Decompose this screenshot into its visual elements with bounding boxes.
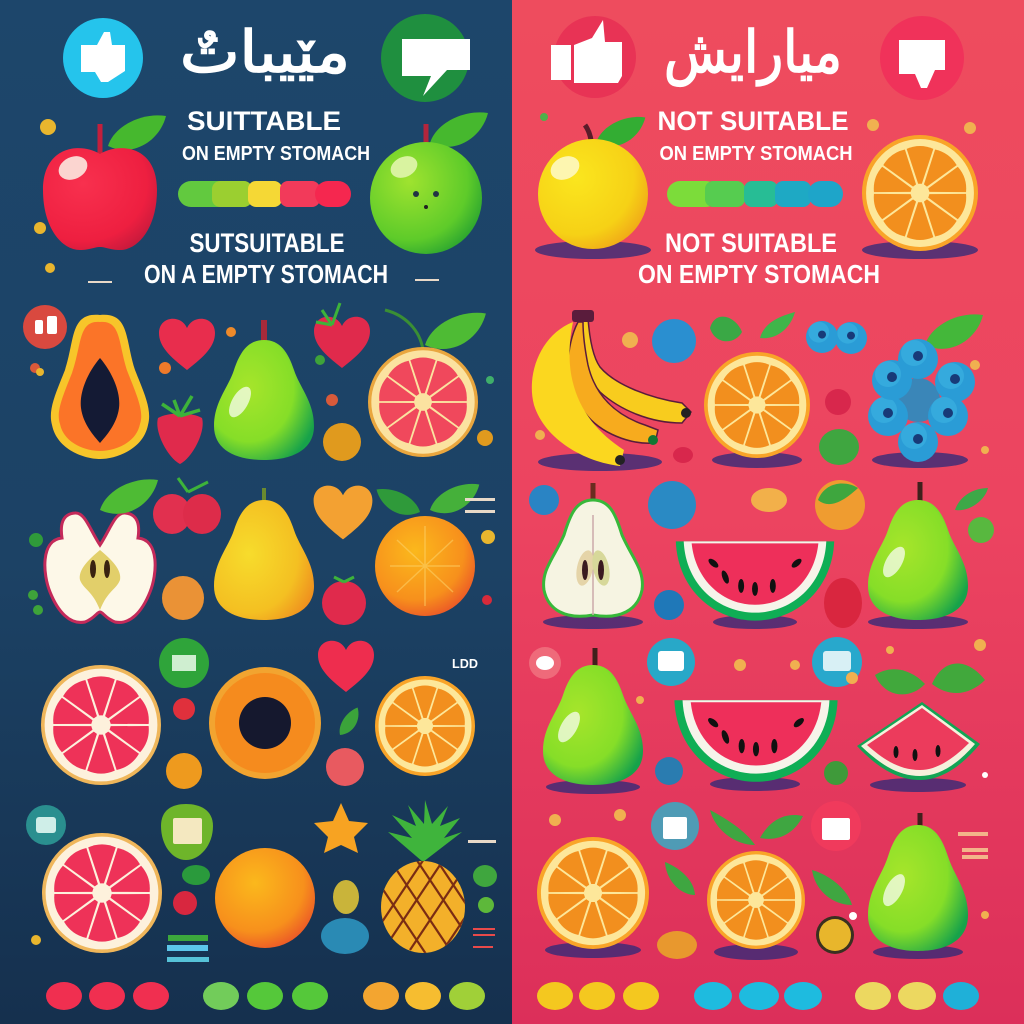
fruit: orange clump [162, 576, 204, 620]
fruit: grapefruit left row 4 [41, 665, 161, 785]
subheading: on empty stomach right: ON EMPTY STOMACH [660, 143, 852, 165]
fruit: star fruit [314, 803, 368, 853]
rating bar: right [667, 181, 843, 207]
fruit: green pear [868, 482, 968, 629]
subheading: on empty stomach left: ON EMPTY STOMACH [182, 143, 370, 165]
confetti: left panel [28, 119, 495, 945]
fruit: whole orange row 5 [215, 848, 315, 948]
fruit: raspberry [824, 578, 862, 628]
fruit: blue blob [321, 918, 369, 954]
dot: gold fruit [323, 423, 361, 461]
fruit: papaya half [51, 315, 149, 459]
dot: red [173, 891, 197, 915]
fruit: blueberry pair [806, 321, 867, 354]
pills: green [203, 982, 328, 1010]
fruit: green leaf [760, 312, 795, 338]
subheading: on a empty stomach: ON A EMPTY STOMACH [144, 259, 388, 289]
fruit: green pear [214, 320, 314, 460]
fruit: raspberry [322, 577, 366, 625]
fruit: heart [318, 641, 374, 692]
fruit: papaya round [209, 667, 321, 779]
fruit: pineapple [381, 800, 465, 953]
leaves [875, 663, 985, 694]
icon: green thumbs down badge [381, 14, 470, 102]
legend lines [167, 935, 209, 962]
icon: red thumbs up badge [551, 16, 636, 98]
fruit: small orange cluster [751, 488, 787, 512]
fruit: green blob [819, 429, 859, 465]
leaf and dot: right of pineapple [473, 865, 497, 913]
fruit: dot blue orange [655, 757, 683, 785]
fruit: green leaf [710, 317, 742, 341]
pills: pale yellow and blue [855, 982, 979, 1010]
pills: orange and lime [363, 982, 485, 1010]
fruit: grapefruit with leaf [368, 310, 486, 457]
fruit: red apple pair [153, 478, 221, 534]
fruit: blueberry [529, 485, 559, 515]
fruit: strawberry [157, 396, 203, 464]
fruit: watermelon [674, 700, 838, 791]
fruit: grapefruit row 5 [42, 833, 162, 953]
icon: leaves [332, 707, 366, 737]
icon: blue bubble with card [651, 802, 699, 850]
heading: suitable: SUITTABLE [187, 106, 341, 136]
title: not suitable arabic heading: ميارايش [664, 18, 842, 86]
fruit: red heart [159, 319, 215, 370]
fruit: strawberry heart [314, 303, 370, 368]
fruit: yellow apple [535, 117, 651, 259]
pills: cyan [694, 982, 822, 1010]
icon: blue bubble [647, 638, 695, 686]
dot: green [968, 517, 994, 543]
dot: orange [166, 753, 202, 789]
fruit: watermelon half [676, 541, 834, 629]
icon: green bubble [159, 638, 209, 688]
fruit: blueberry large [648, 481, 696, 529]
pills: yellow [537, 982, 659, 1010]
fruit: orange slice [704, 352, 810, 468]
fruit: banana bunch [532, 310, 691, 471]
panel: not suitable background [512, 0, 1024, 1024]
fruit: blueberry small [654, 590, 684, 620]
fruit: orange slice top [862, 135, 978, 259]
heading: not suitable second: NOT SUITABLE [665, 228, 837, 258]
leaf: green blob [182, 865, 210, 885]
fruit: blueberry cluster [868, 314, 983, 468]
dot: red [173, 698, 195, 720]
heading: sutsuitable: SUTSUITABLE [190, 228, 344, 258]
fruit: blueberry [652, 319, 696, 363]
legend lines: pineapple side [473, 928, 495, 948]
icon: teal badge [26, 805, 66, 845]
fruit: apple half [45, 479, 158, 622]
heading: not suitable: NOT SUITABLE [658, 106, 848, 136]
icon: stacked plate [657, 931, 697, 959]
panel: suitable background [0, 0, 512, 1024]
icon: blue bubble [812, 637, 862, 687]
fruit: orange slice row 5 [537, 837, 649, 958]
confetti: right panel [535, 113, 989, 920]
icon: blue thumbs up badge [63, 18, 143, 98]
icon: green bubble with card [161, 804, 213, 860]
fruit: yellow pear [214, 488, 314, 620]
fruit: orange slice row 4 [375, 676, 475, 776]
fruit: dot green [824, 761, 848, 785]
fruit: yellow round dot [816, 916, 854, 954]
fruit: green apple [370, 112, 488, 254]
icon: pink bubble with card [811, 801, 861, 851]
fruit: red apple [43, 115, 166, 250]
fruit: small yellow pear [333, 880, 359, 914]
legend lines [958, 832, 988, 859]
fruit: green pear row 4 [543, 648, 643, 794]
fruit: green orange blend [815, 480, 865, 530]
leaves [665, 810, 852, 905]
pills: red [46, 982, 169, 1010]
fruit: pear half [543, 483, 643, 629]
leaf [955, 488, 988, 510]
subheading: on empty stomach second: ON EMPTY STOMACH [638, 259, 880, 289]
icon: red badge [23, 305, 67, 349]
fruit: orange slice row 5 center [707, 851, 805, 960]
dot: red [825, 389, 851, 415]
dot: pink [326, 748, 364, 786]
fruit: whole orange with leaves [375, 484, 479, 616]
rating bar: left [178, 181, 351, 207]
fruit: green pear row 5 [868, 813, 968, 959]
icon: pale badge [529, 647, 561, 679]
label: small badge text: LDD [452, 656, 478, 671]
confetti: left panel lines [88, 279, 496, 843]
dot: red [673, 447, 693, 463]
icon: pink thumbs down badge [880, 16, 964, 100]
fruit: orange heart [314, 486, 372, 539]
title: suitable arabic heading: مێیباتٌ [180, 18, 350, 86]
fruit: watermelon wedge [857, 702, 980, 792]
